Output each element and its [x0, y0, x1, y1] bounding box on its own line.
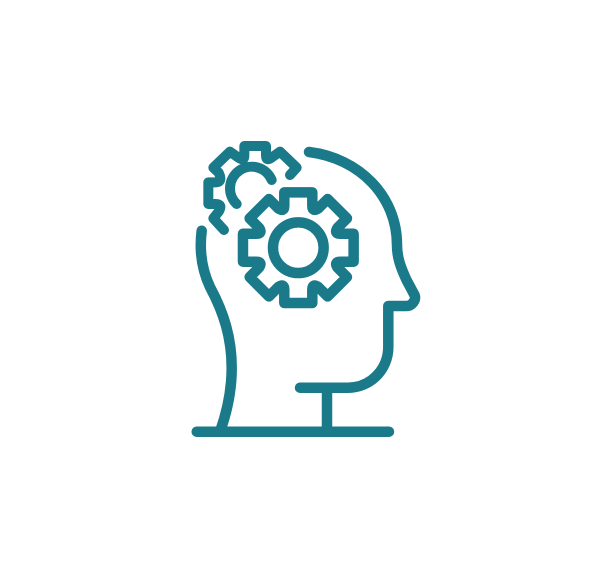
base line — [197, 426, 389, 437]
large gear hub ring — [273, 222, 324, 273]
neck stem — [322, 388, 332, 432]
head outline: crown, forehead, nose and chin — [300, 152, 415, 388]
large gear teeth outline — [243, 192, 354, 303]
small gear inner arc — [230, 167, 272, 204]
small gear teeth outline — [208, 146, 297, 230]
back of head and neck — [201, 231, 232, 432]
large gear — [243, 192, 354, 303]
small gear — [208, 146, 297, 230]
